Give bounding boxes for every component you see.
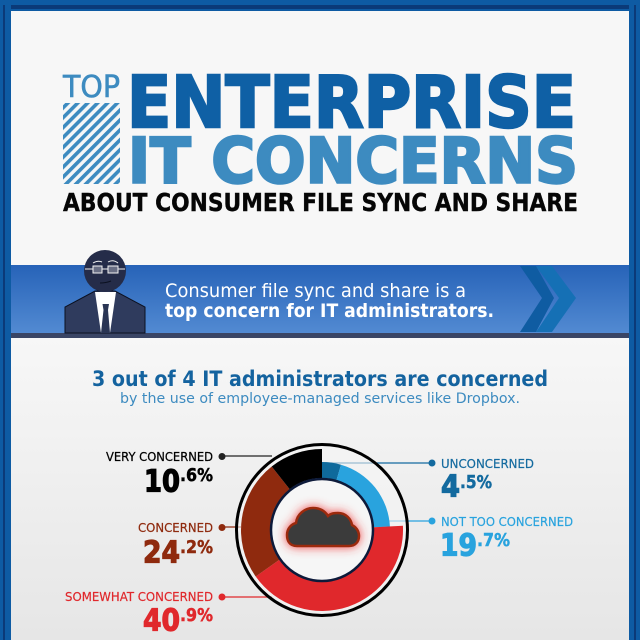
title line: IT CONCERNS: IT CONCERNS (128, 124, 578, 198)
banner band (11, 265, 629, 333)
callout: unconcerned: UNCONCERNED (441, 456, 534, 471)
callout: not too concerned: .7% (477, 530, 510, 551)
callout: somewhat concerned: SOMEWHAT CONCERNED (65, 589, 213, 604)
icon: IT administrator (65, 250, 145, 333)
callout: concerned: CONCERNED (138, 520, 213, 535)
leader lines (222, 456, 432, 597)
segment: concerned (241, 466, 290, 576)
segment: unconcerned (322, 462, 341, 480)
callout: very concerned (106, 449, 226, 500)
segment: somewhat concerned (256, 526, 403, 611)
banner (11, 250, 629, 338)
callout: somewhat concerned: 40 (143, 604, 180, 638)
banner text: top concern for IT administrators. (165, 300, 494, 322)
callout: unconcerned: .5% (460, 472, 492, 493)
callout: unconcerned (428, 456, 534, 504)
segment: very concerned (272, 449, 322, 489)
title (62, 61, 578, 217)
section subheading: by the use of employee-managed services like Dropbox. (120, 391, 520, 407)
section heading: 3 out of 4 IT administrators are concerned (92, 367, 548, 391)
inner circle (271, 479, 373, 581)
segment: not too concerned (336, 465, 390, 527)
outer ring (236, 444, 408, 616)
callout: not too concerned: 19 (440, 528, 477, 564)
callout: very concerned: 10 (144, 464, 180, 500)
donut chart (222, 444, 432, 616)
title word: TOP: TOP (62, 70, 120, 105)
callout: very concerned: .6% (180, 465, 213, 486)
callout: concerned: 24 (143, 536, 180, 570)
callout: concerned (138, 520, 226, 570)
lower section background (11, 338, 629, 640)
icon: cloud (287, 508, 359, 546)
callout: not too concerned (428, 514, 573, 564)
banner text: Consumer file sync and share is a (165, 280, 466, 302)
callout: very concerned: VERY CONCERNED (106, 449, 213, 464)
title line: ENTERPRISE: ENTERPRISE (127, 61, 576, 144)
callout: unconcerned: 4 (441, 470, 460, 504)
banner base strip (11, 333, 629, 338)
callout: not too concerned: NOT TOO CONCERNED (441, 514, 573, 529)
callout: concerned: .2% (180, 537, 213, 558)
callout: somewhat concerned (65, 589, 226, 638)
subtitle: ABOUT CONSUMER FILE SYNC AND SHARE (63, 188, 578, 217)
hatched title block (63, 103, 120, 184)
callout: somewhat concerned: .9% (180, 605, 213, 626)
icon: chevrons (520, 266, 576, 332)
banner text (165, 280, 494, 322)
